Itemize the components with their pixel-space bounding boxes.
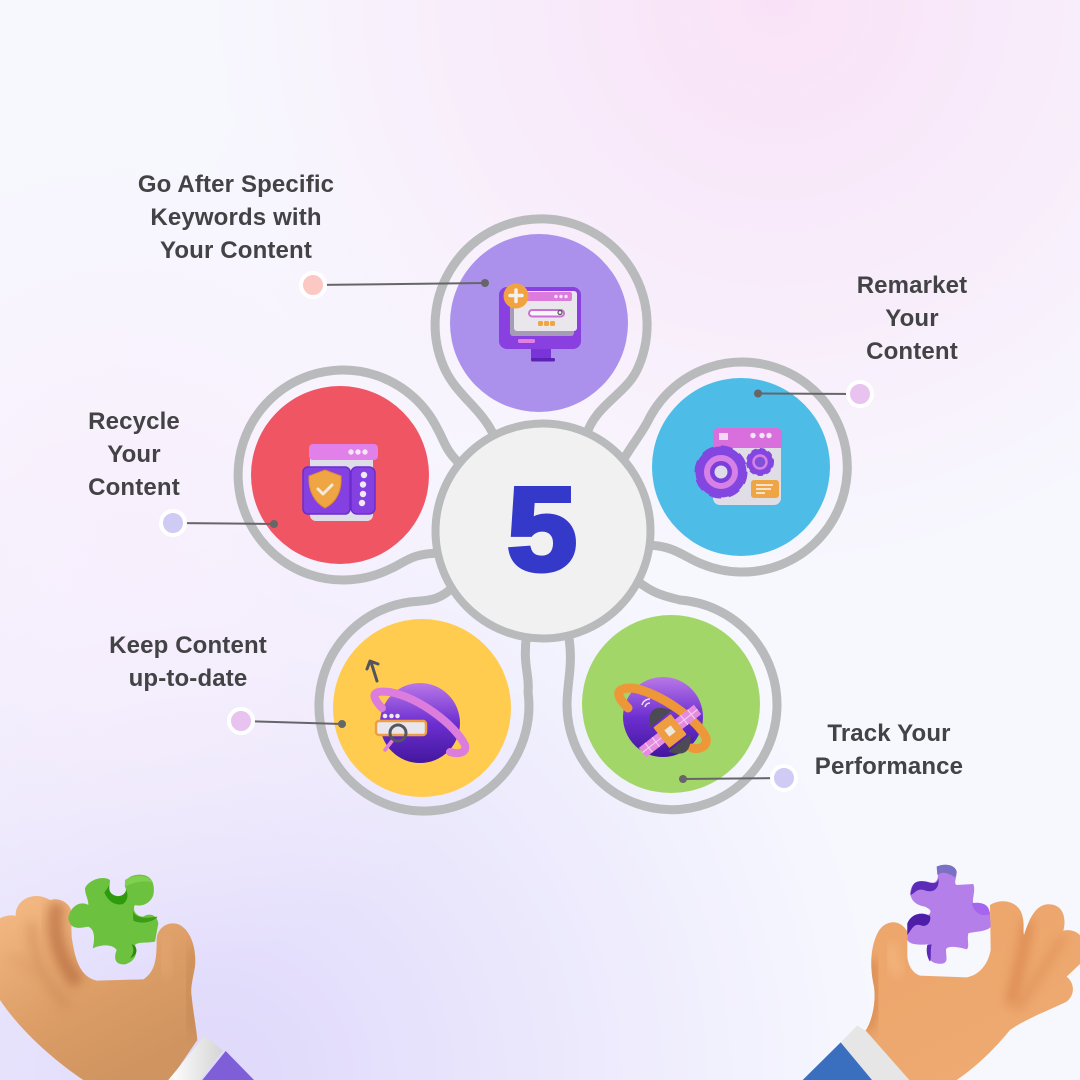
label: keep up-to-date: Keep Content [109,632,267,659]
label: recycle: Recycle [88,408,180,435]
illustration: right hand with purple puzzle piece [803,865,1080,1080]
label: recycle [88,408,180,501]
left hand cuff [168,1036,223,1080]
callout: recycle leader [161,511,278,535]
icon: shield window [303,444,378,521]
center circle [436,424,650,638]
label: remarket: Remarket [857,272,967,299]
panel: recycle circle [251,386,429,564]
right hand cuff [841,1025,909,1080]
label: remarket [857,272,967,365]
label: keywords [138,171,334,264]
petal rings [238,219,847,811]
right hand puzzle piece [907,865,991,964]
label: track performance: Track Your [827,720,951,747]
callout: remarket leader [754,382,872,406]
icon: planet with satellite [619,677,714,773]
label: keep up-to-date [109,632,267,692]
panel: keywords circle [450,234,628,412]
label: remarket: Your [885,305,939,332]
label: keep up-to-date: up-to-date [129,665,247,692]
panel: track performance circle [582,615,760,793]
callout: keep up-to-date leader [229,709,346,733]
icon: gears window [698,428,782,505]
label: keywords: Go After Specific [138,171,334,198]
label: remarket: Content [866,338,958,365]
label: keywords: Your Content [160,237,312,264]
illustration: left hand with green puzzle piece [0,875,254,1080]
icon: monitor [499,284,581,362]
label: track performance: Performance [815,753,963,780]
panel: remarket circle [652,378,830,556]
callout: track performance leader [679,766,796,790]
callout: keywords leader [301,273,489,297]
left hand sleeve [202,1051,254,1080]
icon: planet with search bar [367,661,465,763]
left hand puzzle piece [68,875,158,964]
label: recycle: Content [88,474,180,501]
panel: keep up-to-date circle [333,619,511,797]
center number: 5 [507,463,577,595]
right hand sleeve [803,1042,872,1080]
label: keywords: Keywords with [150,204,322,231]
label: track performance [815,720,963,780]
label: recycle: Your [107,441,161,468]
